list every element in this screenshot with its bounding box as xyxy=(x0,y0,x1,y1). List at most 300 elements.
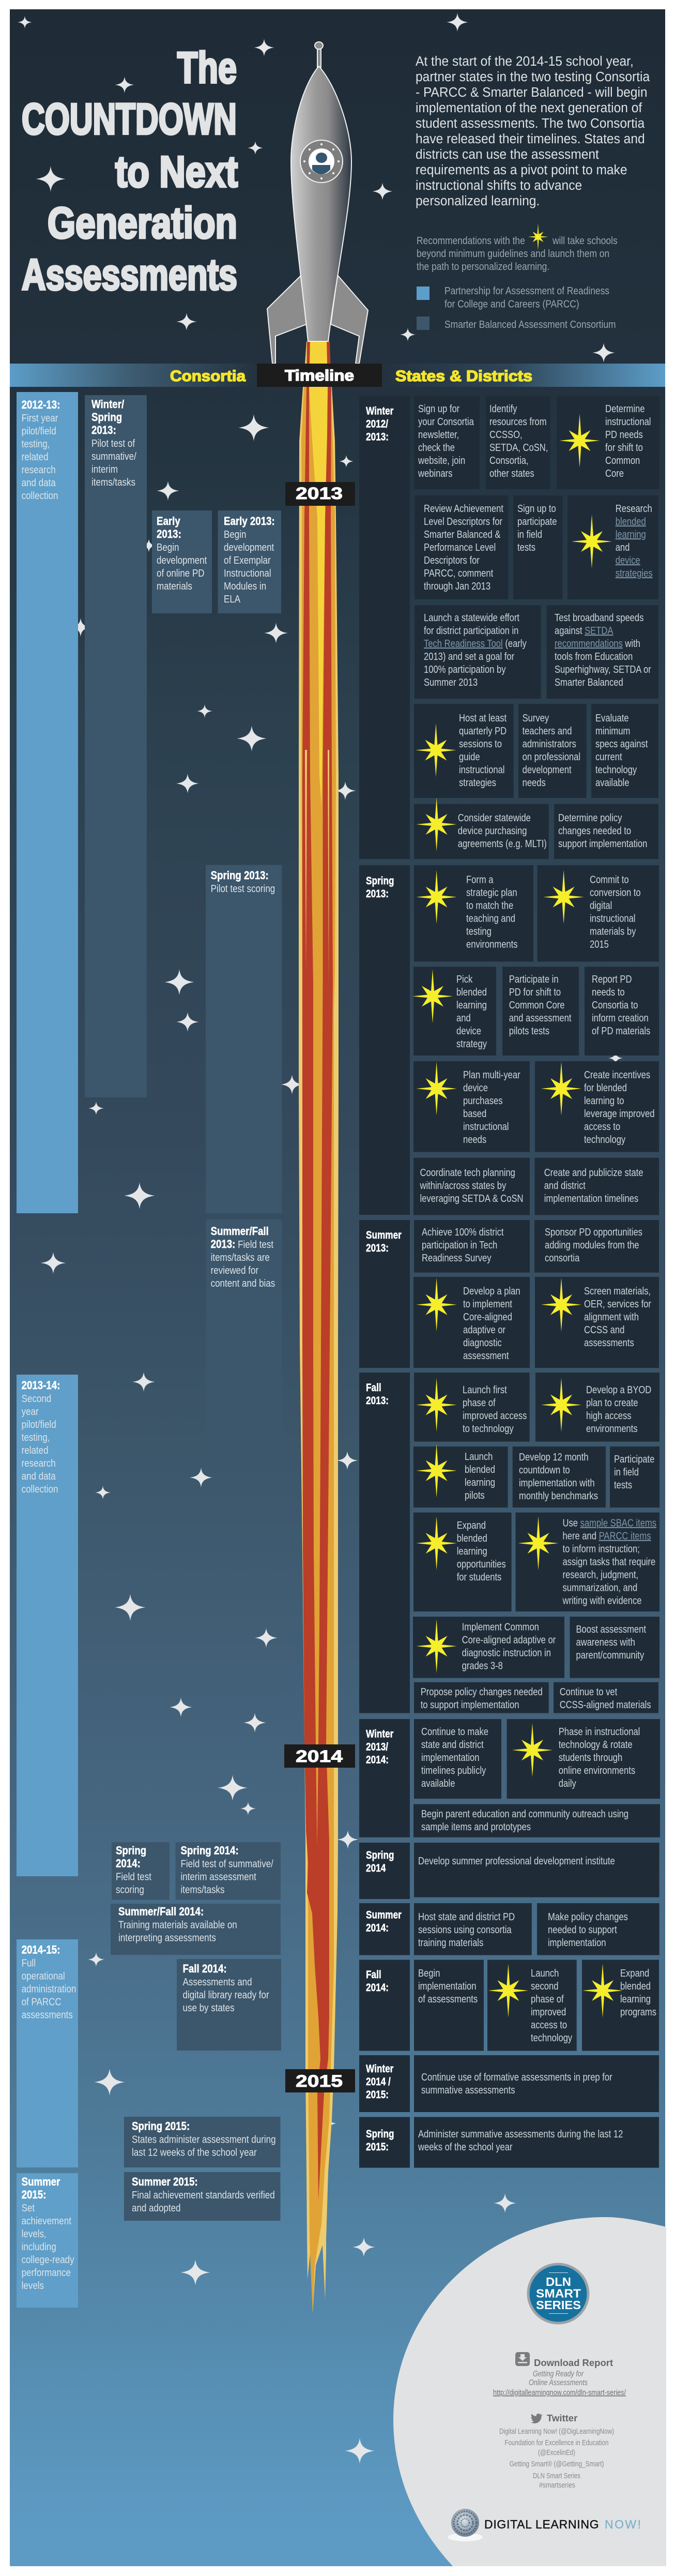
heading: Timeline xyxy=(257,364,382,387)
PARCC Summer 2015: performance xyxy=(22,2267,71,2278)
PARCC Summer 2015: college-ready xyxy=(22,2254,74,2265)
box: publicize timelines: Create and publicize state xyxy=(544,1167,643,1178)
box: public timelines: state and district xyxy=(421,1738,484,1750)
SB Summer 2015: Summer 2015: xyxy=(132,2176,198,2188)
box: sample items xyxy=(516,1513,659,1611)
box: identify resources: other states xyxy=(489,468,534,479)
box: begin implementation: implementation xyxy=(418,1980,476,1992)
SB Summer/Fall 2013: content and bias xyxy=(211,1277,275,1289)
box: parent outreach: Begin parent education and community outreach using xyxy=(421,1808,628,1819)
box: device purchasing xyxy=(414,797,549,859)
box: sign up for newsletter: check the xyxy=(418,442,455,453)
box: blended pilots: blended xyxy=(465,1464,495,1475)
box: tech readiness survey xyxy=(414,1220,530,1273)
SB Spring 2014 scoring: scoring xyxy=(116,1884,144,1895)
box: policy changes xyxy=(554,804,658,859)
SB Early 2013 PD: of online PD xyxy=(157,567,205,579)
label: Spring 2015: Spring xyxy=(366,2129,394,2140)
SB Early 2013 modules xyxy=(218,510,281,613)
box: evaluate specs: minimum xyxy=(595,725,630,736)
heading: Timeline: Timeline xyxy=(285,367,354,384)
box: expand blended xyxy=(413,1513,512,1611)
label: Summer 2013: Summer xyxy=(366,1230,402,1241)
box: host PD sessions: sessions using consortia xyxy=(418,1924,512,1935)
box: survey teachers: teachers and xyxy=(523,725,572,736)
box: device purchasing: agreements (e.g. MLTI) xyxy=(458,838,547,849)
box: quarterly PD: strategies xyxy=(459,777,496,788)
box: sign up for field tests: tests xyxy=(517,541,535,553)
box: boost awareness xyxy=(570,1617,659,1678)
box: statewide effort: for district participation in xyxy=(424,625,518,636)
box: test broadband: recommendations xyxy=(555,638,623,649)
box: pick blended strategy xyxy=(412,967,496,1056)
box: identify resources: Consortia, xyxy=(489,455,529,466)
box: coordinate tech planning xyxy=(413,1158,530,1215)
box: boost awareness: awareness with xyxy=(576,1636,635,1648)
box: public timelines: implementation xyxy=(421,1751,479,1763)
box: second phase: technology xyxy=(531,2032,573,2043)
box: blended pilots: pilots xyxy=(465,1489,485,1501)
label: Winter 2014/2015: Winter xyxy=(366,2063,394,2075)
box: determine PD needs: Determine xyxy=(605,403,645,414)
box: review descriptors: Review Achievement xyxy=(424,503,503,514)
twitter text: Foundation for Excellence in Education xyxy=(504,2438,608,2447)
PARCC Summer 2015: levels, xyxy=(22,2228,47,2239)
box: publicize timelines: and district xyxy=(544,1180,586,1191)
PARCC Summer 2015: Summer xyxy=(22,2176,60,2188)
box: expand programs xyxy=(582,1960,659,2051)
PARCC 2013-14: related xyxy=(22,1444,49,1456)
PARCC 2013-14 xyxy=(17,1375,78,1876)
SB Spring 2014 scoring xyxy=(112,1842,170,1900)
box: sample items: PARCC items xyxy=(599,1530,651,1542)
box: adaptive instruction: Implement Common xyxy=(462,1621,539,1633)
PARCC Summer 2015 xyxy=(17,2173,78,2308)
box: review descriptors: PARCC, comment xyxy=(424,567,493,579)
box: first phase access: phase of xyxy=(463,1397,496,1408)
PARCC 2012-13: First year xyxy=(22,412,58,424)
box: report PD needs: Consortia to xyxy=(592,999,638,1011)
box: host PD sessions: training materials xyxy=(418,1937,483,1948)
box: pick blended strategy: blended xyxy=(456,986,487,998)
SB Spring 2014 field test: interim assessment xyxy=(181,1871,257,1882)
PARCC 2014-15: administration xyxy=(22,1983,76,1995)
SB Spring 2013: Spring 2013: xyxy=(211,870,269,882)
label: Summer 2014 xyxy=(359,1903,410,1955)
PARCC Summer 2015: Set xyxy=(22,2202,35,2213)
box: test broadband: tools from Education xyxy=(555,651,633,662)
box: first phase access: to technology xyxy=(463,1423,514,1434)
SB Spring 2013: Pilot test scoring xyxy=(211,883,275,894)
box: vet materials: Continue to vet xyxy=(560,1686,617,1697)
box: screen materials: assessments xyxy=(584,1337,634,1348)
label: Winter 2012/2013: 2013: xyxy=(366,431,389,443)
twitter text: #smartseries xyxy=(539,2481,575,2490)
box: propose policy changes: Propose policy changes needed xyxy=(421,1686,543,1697)
box: screen materials: Screen materials, xyxy=(584,1285,651,1297)
recommendations note with star: beyond minimum guidelines and launch them on xyxy=(417,248,609,259)
box: adaptive plan xyxy=(413,1277,530,1368)
label: Summer 2014: Summer xyxy=(366,1909,402,1921)
PARCC 2012-13: 2012-13: xyxy=(22,399,60,411)
label: Fall 2013 xyxy=(359,1373,410,1713)
box: sign up for field tests: Sign up to xyxy=(517,503,556,514)
label: Fall 2014: Fall xyxy=(366,1969,381,1981)
box: begin implementation: Begin xyxy=(418,1967,440,1979)
box: phase in technology xyxy=(507,1719,660,1799)
label: Spring 2014: 2014 xyxy=(366,1863,386,1874)
box: participate in PD: PD for shift to xyxy=(509,986,561,998)
box: 12 month countdown: monthly benchmarks xyxy=(519,1490,598,1501)
box: identify resources xyxy=(486,396,550,489)
footer ellipse xyxy=(393,2217,666,2566)
box: adaptive instruction: Core-aligned adaptive or xyxy=(462,1634,556,1646)
year marker 2014 xyxy=(284,1744,355,1768)
header band xyxy=(10,364,665,387)
title: to Next xyxy=(115,147,238,196)
PARCC 2012-13: collection xyxy=(22,490,58,501)
box: strategic plan: strategic plan xyxy=(466,886,517,898)
icon: download xyxy=(515,2352,530,2366)
recommendations note with star: will take schools xyxy=(552,235,618,246)
box: statewide effort: Summer 2013 xyxy=(424,676,478,688)
SB Summer/Fall 2014 xyxy=(111,1904,281,1955)
intro paragraph: student assessments. The two Consortia xyxy=(416,116,645,131)
title: The xyxy=(177,43,237,92)
label: Summer 2013: 2013: xyxy=(366,1243,389,1254)
box: research blended learning: blended xyxy=(616,516,646,527)
box: sign up for field tests: in field xyxy=(517,529,542,540)
SB Summer/Fall 2013: 2013: xyxy=(211,1239,235,1251)
box: coordinate tech planning: Coordinate tech planning xyxy=(420,1167,515,1178)
box: screen materials: OER, services for xyxy=(584,1298,651,1309)
label: Spring 2014 xyxy=(359,1843,410,1899)
SB Early 2013 modules: development xyxy=(224,541,274,553)
box: policy changes: support implementation xyxy=(558,838,647,849)
box: formative assessments: Continue use of formative assessments in prep for xyxy=(421,2071,612,2083)
SB Summer/Fall 2013: reviewed for xyxy=(211,1264,258,1276)
legend xyxy=(417,285,616,330)
box: public timelines xyxy=(414,1719,501,1799)
box: evaluate specs xyxy=(591,704,658,798)
box: host PD sessions xyxy=(414,1903,532,1955)
box: second phase: phase of xyxy=(531,1993,564,2005)
PARCC 2014-15: 2014-15: xyxy=(22,1944,60,1956)
box: make policy changes: implementation xyxy=(548,1937,606,1948)
SB Fall 2014: digital library ready for xyxy=(183,1989,269,2000)
box: tech readiness survey: Achieve 100% district xyxy=(422,1226,504,1238)
box: phase in technology: daily xyxy=(559,1777,577,1789)
box: participate in PD: pilots tests xyxy=(509,1025,549,1036)
box: public timelines: Continue to make xyxy=(421,1725,488,1737)
box: digital materials: materials by xyxy=(590,925,636,937)
SB Summer/Fall 2013 xyxy=(206,1219,282,1470)
SB Spring 2015: Spring 2015: xyxy=(132,2120,190,2133)
box: sample items: writing with evidence xyxy=(562,1594,642,1606)
box: sign up for field tests xyxy=(513,495,562,599)
SB Spring 2015: States administer assessment during xyxy=(132,2133,276,2145)
box: screen materials xyxy=(535,1277,659,1368)
download report text xyxy=(493,2357,626,2397)
box: evaluate specs: available xyxy=(595,777,629,788)
box: determine PD needs: for shift to xyxy=(605,442,643,453)
box: begin implementation xyxy=(414,1960,484,2051)
label: Winter 2013/2014: 2014: xyxy=(366,1754,389,1766)
box: sponsor PD: Sponsor PD opportunities xyxy=(545,1226,642,1238)
box: make policy changes xyxy=(537,1903,659,1955)
box: review descriptors xyxy=(415,495,509,599)
PARCC 2013-14: research xyxy=(22,1457,56,1469)
box: adaptive plan: diagnostic xyxy=(463,1337,502,1348)
box: host PD sessions: Host state and district PD xyxy=(418,1911,515,1922)
box: second phase: improved xyxy=(531,2006,566,2017)
rocket right fin xyxy=(331,275,368,364)
box: BYOD plan: plan to create xyxy=(586,1397,638,1408)
box: quarterly PD xyxy=(414,704,514,798)
box: test broadband: Test broadband speeds xyxy=(555,612,643,623)
label: Winter 2014/2015: 2015: xyxy=(366,2089,389,2101)
download report text: Download Report xyxy=(534,2357,613,2368)
box: determine PD needs: Core xyxy=(605,468,624,479)
box: second phase: access to xyxy=(531,2019,567,2030)
box: evaluate specs: Evaluate xyxy=(595,712,629,724)
label: Spring 2013: 2013: xyxy=(366,888,389,900)
box: sign up for newsletter: your Consortia xyxy=(418,416,474,427)
PARCC 2012-13: pilot/field xyxy=(22,425,56,436)
recommendations note with star: Recommendations with the xyxy=(417,235,525,246)
box: pick blended strategy: and xyxy=(456,1012,471,1023)
title: COUNTDOWN xyxy=(22,95,237,143)
box: determine PD needs xyxy=(557,396,659,489)
box: determine PD needs: instructional xyxy=(605,416,651,427)
box: participate in field tests xyxy=(610,1447,659,1508)
SB Summer/Fall 2013: items/tasks are xyxy=(211,1252,270,1263)
PARCC 2014-15: of PARCC xyxy=(22,1996,62,2008)
box: pick blended strategy: strategy xyxy=(456,1038,487,1049)
box: determine PD needs: Common xyxy=(605,455,640,466)
PARCC Summer 2015: levels xyxy=(22,2280,44,2291)
box: sample items: to inform instruction; xyxy=(562,1543,640,1555)
box: research blended learning: and xyxy=(616,541,630,553)
label: Fall 2013: 2013: xyxy=(366,1395,389,1407)
box: test broadband: SETDA xyxy=(585,625,613,636)
box: digital materials: 2015 xyxy=(590,938,609,950)
box: sign up for newsletter: newsletter, xyxy=(418,429,459,440)
SB Summer/Fall 2014: interpreting assessments xyxy=(118,1932,216,1944)
box: expand blended: blended xyxy=(457,1532,487,1544)
SB Winter/Spring 2013: 2013: xyxy=(91,425,116,436)
box: 12 month countdown: implementation with xyxy=(519,1477,595,1488)
box: report PD needs: Report PD xyxy=(592,973,632,985)
SB Winter/Spring 2013: interim xyxy=(91,463,118,475)
SB Spring 2014 field test: items/tasks xyxy=(181,1884,224,1895)
box: second phase: second xyxy=(531,1980,558,1992)
box: identify resources: CCSSO, xyxy=(489,429,523,440)
box: screen materials: CCSS and xyxy=(584,1324,624,1335)
logo: Digital Learning Now: DIGITAL LEARNING xyxy=(484,2518,599,2531)
box: test broadband xyxy=(547,605,658,699)
box: sign up for newsletter: webinars xyxy=(418,468,452,479)
box: research blended learning: Research xyxy=(616,503,652,514)
box: survey teachers: Survey xyxy=(523,712,549,724)
box: sponsor PD: adding modules from the xyxy=(545,1239,639,1251)
box: pick blended strategy: learning xyxy=(456,999,487,1011)
PARCC 2012-13: research xyxy=(22,464,56,475)
box: public timelines: timelines publicly xyxy=(421,1764,486,1776)
box: quarterly PD: Host at least xyxy=(459,712,507,724)
box: BYOD plan: high access xyxy=(586,1410,632,1421)
SB Summer 2015: and adopted xyxy=(132,2202,180,2213)
download report text: http://digitallearningnow.com/dln-smart-series/ xyxy=(493,2388,626,2397)
box: sample items: research, judgment, xyxy=(562,1569,638,1580)
SB Spring 2014 field test: Spring 2014: xyxy=(181,1845,239,1857)
box: strategic plan: environments xyxy=(466,938,518,950)
box: test broadband: Smarter Balanced xyxy=(555,676,623,688)
box: publicize timelines xyxy=(534,1158,659,1215)
label: Spring 2013 xyxy=(359,865,410,1215)
label: Winter 2012/2013: 2012/ xyxy=(366,418,389,430)
heading: Consortia: Consortia xyxy=(170,368,246,385)
SB Fall 2014: Fall 2014: xyxy=(183,1963,227,1975)
box: create incentives: access to xyxy=(584,1121,620,1132)
box: quarterly PD: sessions to xyxy=(459,738,502,749)
box: research blended learning xyxy=(567,495,658,599)
box: sponsor PD: consortia xyxy=(545,1252,580,1263)
label: Winter 2012/2013: Winter xyxy=(366,405,394,417)
twitter text: Digital Learning Now! (@DigLearningNow) xyxy=(499,2427,614,2436)
box: tech readiness survey: Readiness Survey xyxy=(422,1252,492,1263)
box: blended pilots: learning xyxy=(465,1477,495,1488)
SB Winter/Spring 2013 xyxy=(85,395,147,1097)
box: participate in PD xyxy=(502,967,579,1056)
box: adaptive plan: adaptive or xyxy=(463,1324,505,1335)
heading: States and Districts: States & Districts xyxy=(395,368,532,385)
box: phase in technology: students through xyxy=(559,1751,622,1763)
legend: PARCC: for College and Careers (PARCC) xyxy=(444,298,579,310)
box: adaptive instruction: diagnostic instruction in xyxy=(462,1647,551,1659)
PARCC 2014-15: Full xyxy=(22,1957,36,1969)
rocket antenna xyxy=(317,48,321,67)
box: policy changes: Determine policy xyxy=(558,812,622,823)
box: policy changes: changes needed to xyxy=(558,825,631,836)
box: sample items: sample SBAC items xyxy=(580,1517,656,1529)
box: statewide effort: 100% participation by xyxy=(424,664,506,675)
PARCC 2013-14: and data xyxy=(22,1470,56,1482)
box: participate in field tests: in field xyxy=(614,1466,639,1478)
box: adaptive instruction xyxy=(413,1617,564,1678)
box: public timelines: available xyxy=(421,1777,455,1789)
SB Summer 2015 xyxy=(124,2172,280,2221)
SB Winter/Spring 2013: Pilot test of xyxy=(91,438,135,449)
box: statewide effort: Launch a statewide effort xyxy=(424,612,519,623)
box: evaluate specs: technology xyxy=(595,764,637,775)
rocket body xyxy=(291,66,351,341)
box: expand blended: for students xyxy=(457,1571,501,1583)
box: screen materials: alignment with xyxy=(584,1311,639,1322)
box: blended pilots: Launch xyxy=(465,1451,493,1462)
box: BYOD plan: Develop a BYOD xyxy=(586,1384,651,1395)
SB Winter/Spring 2013: Winter/ xyxy=(91,399,124,411)
box: test broadband: against xyxy=(555,625,585,636)
box: expand programs: Expand xyxy=(620,1967,649,1979)
intro paragraph: partner states in the two testing Consortia xyxy=(416,69,650,84)
SB Early 2013 modules: of Exemplar xyxy=(224,554,271,566)
legend: PARCC xyxy=(417,285,609,310)
label: Winter 2013/2014 xyxy=(359,1719,410,1837)
SB Summer 2015: Final achievement standards verified xyxy=(132,2189,275,2201)
box: BYOD plan xyxy=(535,1373,659,1442)
PARCC Summer 2015: achievement xyxy=(22,2215,72,2226)
SB Early 2013 PD: 2013: xyxy=(157,529,181,540)
year marker 2013 xyxy=(285,482,355,506)
box: multi-year purchases xyxy=(413,1061,530,1152)
box: multi-year purchases: Plan multi-year xyxy=(463,1069,520,1080)
SB Early 2013 modules: ELA xyxy=(224,593,241,605)
intro paragraph: have released their timelines. States and xyxy=(416,131,645,146)
SB Early 2013 modules: Instructional xyxy=(224,567,271,579)
box: tech readiness survey: participation in Tech xyxy=(422,1239,497,1251)
label: Fall 2014: 2014: xyxy=(366,1982,389,1994)
box: phase in technology: technology & rotate xyxy=(559,1738,633,1750)
box: report PD needs: needs to xyxy=(592,986,625,998)
box: participate in PD: Participate in xyxy=(509,973,559,985)
label: Spring 2013: Spring xyxy=(366,876,394,887)
twitter text: Twitter xyxy=(547,2413,577,2423)
box: statewide effort xyxy=(415,605,541,699)
PARCC 2013-14: 2013-14: xyxy=(22,1380,60,1392)
SB Early 2013 PD: development xyxy=(157,554,207,566)
year marker 2013: 2013 xyxy=(296,484,343,503)
box: expand blended: opportunities xyxy=(457,1558,506,1570)
consortia column xyxy=(17,392,282,2308)
SB Summer/Fall 2014: Training materials available on xyxy=(118,1919,237,1931)
box: second phase xyxy=(487,1960,577,2051)
SB Summer/Fall 2013: Summer/Fall xyxy=(211,1226,269,1238)
title xyxy=(22,43,238,299)
SB Spring 2015: last 12 weeks of the school year xyxy=(132,2146,257,2158)
box: quarterly PD: guide xyxy=(459,751,480,762)
title: Generation xyxy=(48,199,237,247)
SB Early 2013 PD: Early xyxy=(157,516,180,528)
box: sponsor PD xyxy=(534,1220,659,1273)
box: digital materials: instructional xyxy=(590,912,635,924)
SB Early 2013 PD: materials xyxy=(157,580,192,592)
box: pick blended strategy: Pick xyxy=(456,973,473,985)
box: BYOD plan: environments xyxy=(586,1423,638,1434)
download report text: Getting Ready for xyxy=(533,2370,584,2378)
box: administer summative: Administer summative assessments during the last 12 xyxy=(418,2128,623,2140)
box: coordinate tech planning: leveraging SETDA & CoSN xyxy=(420,1193,524,1204)
box: participate in PD: and assessment xyxy=(509,1012,571,1023)
box: adaptive plan: Develop a plan xyxy=(463,1285,520,1297)
box: multi-year purchases: purchases xyxy=(463,1095,503,1106)
PARCC 2013-14: Second xyxy=(22,1393,51,1404)
legend: Smarter Balanced: Smarter Balanced Assessment Consortium xyxy=(444,319,616,330)
SB Early 2013 modules: Modules in xyxy=(224,580,266,592)
title: Assessments xyxy=(22,250,237,299)
box: strategic plan xyxy=(414,865,533,962)
SB Winter/Spring 2013: Spring xyxy=(91,412,122,424)
intro paragraph: personalized learning. xyxy=(416,193,540,208)
box: review descriptors: Performance Level xyxy=(424,541,496,553)
box: coordinate tech planning: within/across states by xyxy=(420,1180,507,1191)
recommendations note with star: the path to personalized learning. xyxy=(417,261,549,272)
download report text: Online Assessments xyxy=(529,2378,588,2387)
rocket window with emblem xyxy=(300,140,343,183)
box: adaptive plan: assessment xyxy=(463,1350,509,1361)
box: research blended learning: device xyxy=(616,554,640,566)
box: multi-year purchases: device xyxy=(463,1082,488,1093)
